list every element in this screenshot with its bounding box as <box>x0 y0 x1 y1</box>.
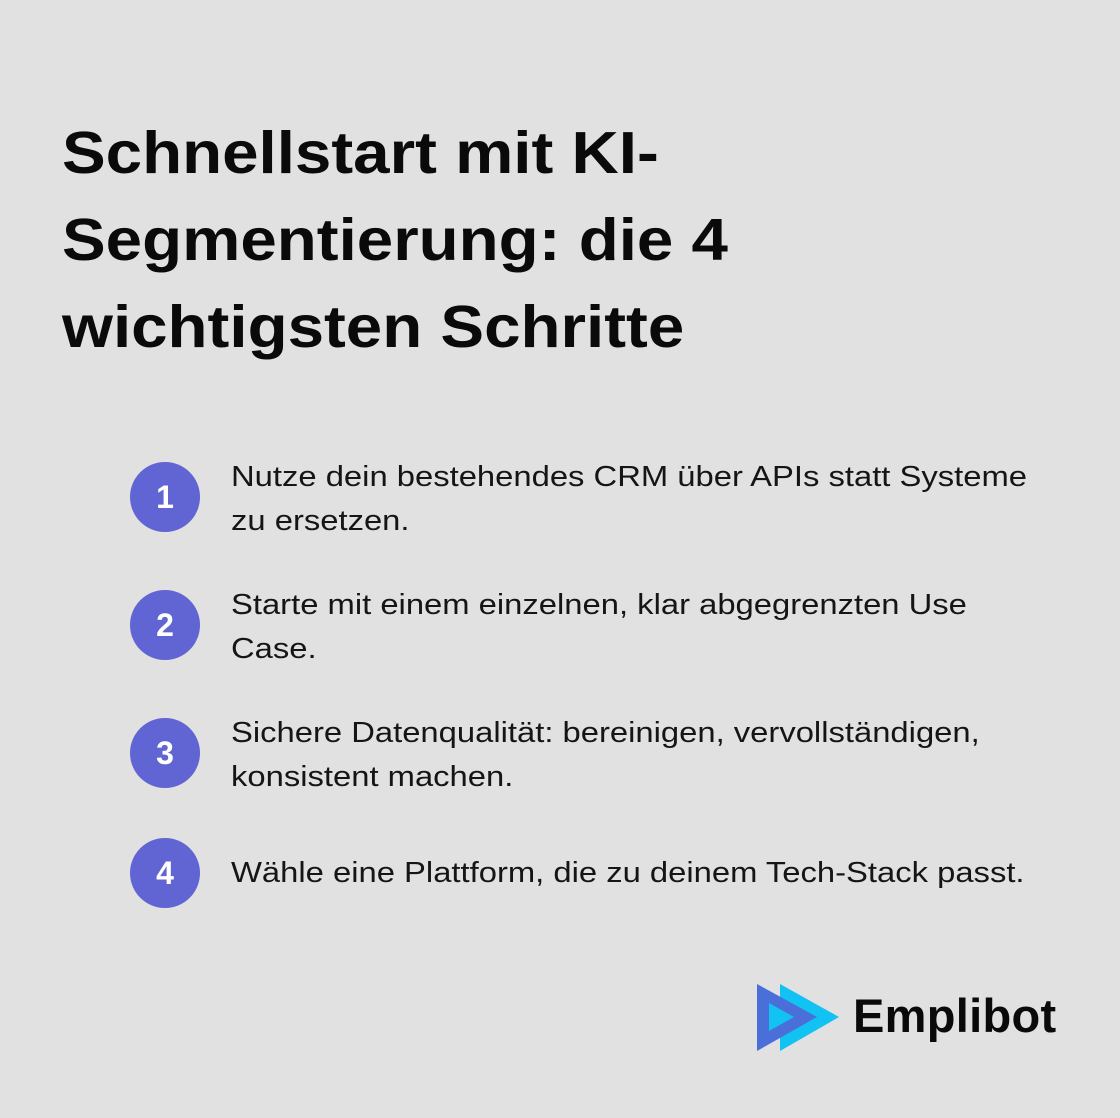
text 1 <box>231 461 1027 537</box>
title: Segmentierung: die 4 <box>62 207 728 273</box>
number 3: 3 <box>156 735 174 771</box>
number 1 <box>130 462 200 532</box>
text 3: Sichere Datenqualität: bereinigen, vervollständigen, <box>231 717 980 749</box>
text 4: Wähle eine Plattform, die zu deinem Tech-Stack passt. <box>231 857 1025 889</box>
number 3 <box>130 718 200 788</box>
text 2: Case. <box>231 633 317 665</box>
number 2: 2 <box>156 607 174 643</box>
text 2: Starte mit einem einzelnen, klar abgegrenzten Use <box>231 589 967 621</box>
title <box>62 120 728 360</box>
icon: play triangles <box>757 984 839 1051</box>
text 3: konsistent machen. <box>231 761 513 793</box>
text 3 <box>231 717 980 793</box>
title: wichtigsten Schritte <box>62 294 684 360</box>
logo text: Emplibot <box>853 989 1056 1042</box>
text 1: zu ersetzen. <box>231 505 410 537</box>
title: Schnellstart mit KI- <box>62 120 659 186</box>
number 1: 1 <box>156 479 174 515</box>
step 2 <box>130 589 967 665</box>
text 1: Nutze dein bestehendes CRM über APIs statt Systeme <box>231 461 1027 493</box>
number 4: 4 <box>156 855 174 891</box>
step 1 <box>130 461 1027 537</box>
number 4 <box>130 838 200 908</box>
step 3 <box>130 717 980 793</box>
text 2 <box>231 589 967 665</box>
logo <box>757 984 1056 1051</box>
step 4 <box>130 838 1025 908</box>
number 2 <box>130 590 200 660</box>
